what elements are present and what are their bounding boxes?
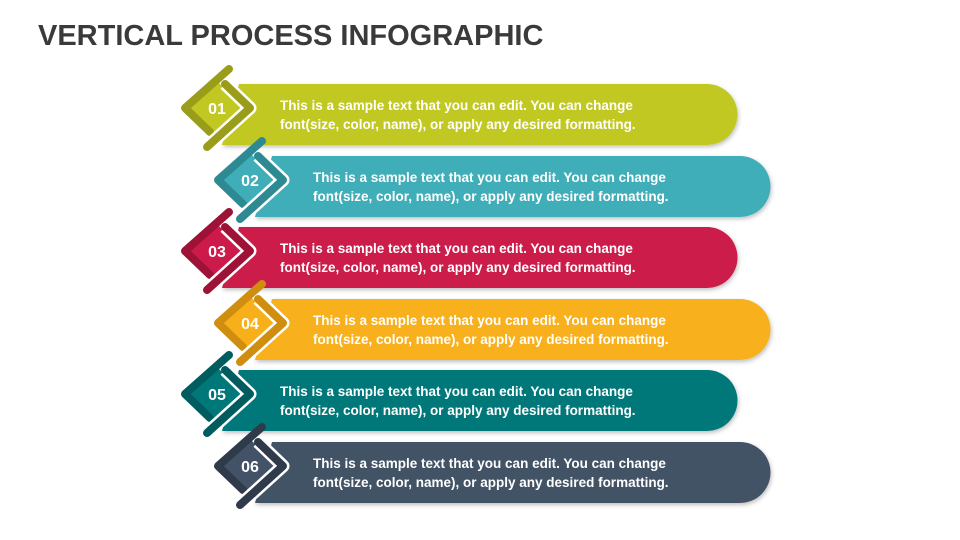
- text 03: This is a sample text that you can edit. You can change: [280, 241, 633, 256]
- icon diamond 02: [218, 141, 283, 219]
- icon diamond 04: [218, 284, 283, 362]
- text 03: font(size, color, name), or apply any desired formatting.: [280, 260, 636, 275]
- icon diamond 04: 04: [241, 316, 259, 333]
- icon diamond 06: 06: [241, 459, 259, 476]
- step 05: [185, 355, 737, 433]
- icon diamond 06: [218, 427, 283, 505]
- step 01: [185, 69, 737, 147]
- bar 05: [222, 370, 737, 431]
- text 06: font(size, color, name), or apply any desired formatting.: [313, 475, 669, 490]
- bar 03: [222, 227, 737, 288]
- text 04: font(size, color, name), or apply any desired formatting.: [313, 332, 669, 347]
- text 02: This is a sample text that you can edit. You can change: [313, 170, 666, 185]
- icon diamond 05: 05: [208, 387, 226, 404]
- step 03: [185, 212, 737, 290]
- step 04: [218, 284, 770, 362]
- text 05: font(size, color, name), or apply any desired formatting.: [280, 403, 636, 418]
- icon diamond 01: 01: [208, 101, 226, 118]
- bar 01: [222, 84, 737, 145]
- icon diamond 02: 02: [241, 173, 259, 190]
- step 02: [218, 141, 770, 219]
- text 04: This is a sample text that you can edit. You can change: [313, 313, 666, 328]
- bar 06: [255, 442, 770, 503]
- icon diamond 03: [185, 212, 250, 290]
- title: VERTICAL PROCESS INFOGRAPHIC: [38, 20, 543, 52]
- text 01: This is a sample text that you can edit. You can change: [280, 98, 633, 113]
- text 06: This is a sample text that you can edit. You can change: [313, 456, 666, 471]
- step 06: [218, 427, 770, 505]
- icon diamond 05: [185, 355, 250, 433]
- icon diamond 01: [185, 69, 250, 147]
- bar 02: [255, 156, 770, 217]
- icon diamond 03: 03: [208, 244, 226, 261]
- text 02: font(size, color, name), or apply any desired formatting.: [313, 189, 669, 204]
- text 05: This is a sample text that you can edit. You can change: [280, 384, 633, 399]
- bar 04: [255, 299, 770, 360]
- text 01: font(size, color, name), or apply any desired formatting.: [280, 117, 636, 132]
